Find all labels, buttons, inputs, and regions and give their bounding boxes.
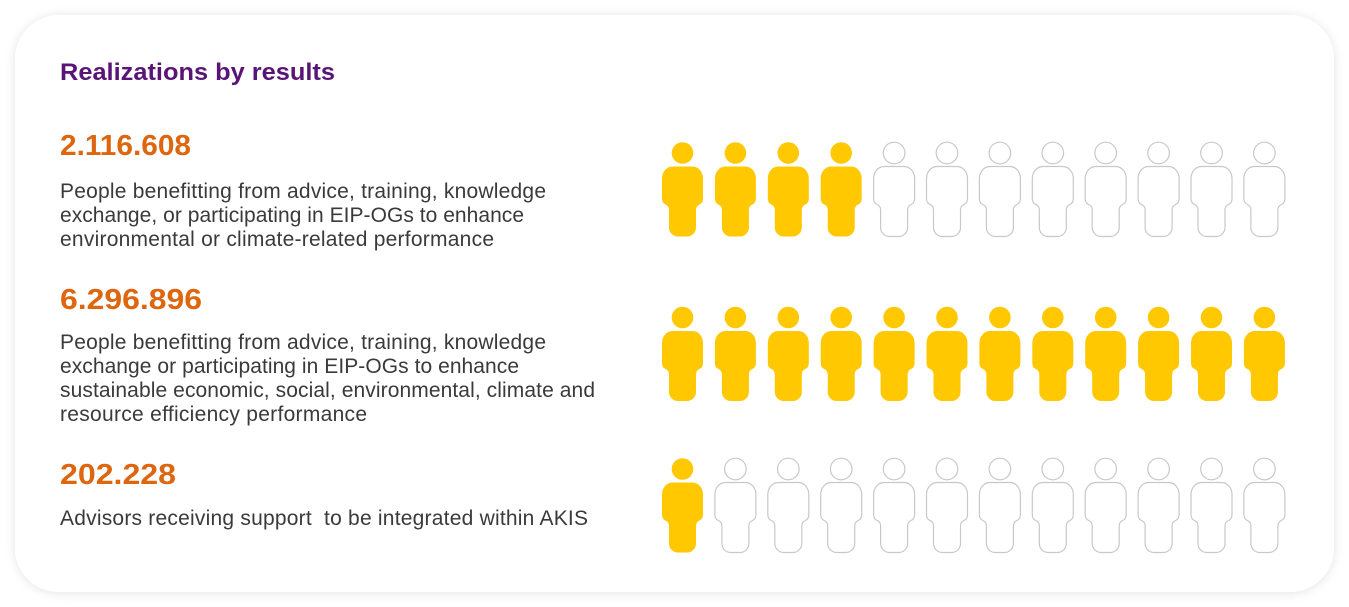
description: People benefitting from advice, training, knowledge [60, 331, 546, 354]
pictogram row 1: 4 of 12 filled [662, 142, 1285, 236]
description: sustainable economic, social, environmental, climate and [60, 379, 595, 402]
description [60, 180, 546, 251]
value: 202.228 [60, 459, 176, 491]
pictogram row 2: 12 of 12 filled [662, 307, 1285, 401]
description: People benefitting from advice, training, knowledge [60, 180, 546, 203]
description: exchange or participating in EIP-OGs to enhance [60, 355, 519, 378]
value: 6.296.896 [60, 284, 202, 316]
description: Advisors receiving support to be integrated within AKIS [60, 507, 588, 530]
stat: sustainable performance [60, 284, 595, 426]
value: 2.116.608 [60, 130, 191, 162]
description [60, 331, 595, 426]
description: environmental or climate-related performance [60, 228, 494, 251]
title: Realizations by results [60, 59, 335, 86]
pictogram row 3: 1 of 12 filled [662, 458, 1285, 552]
description: exchange, or participating in EIP-OGs to enhance [60, 204, 524, 227]
stat: environmental performance [60, 130, 546, 251]
stat: advisors [60, 459, 588, 530]
description: resource efficiency performance [60, 403, 367, 426]
